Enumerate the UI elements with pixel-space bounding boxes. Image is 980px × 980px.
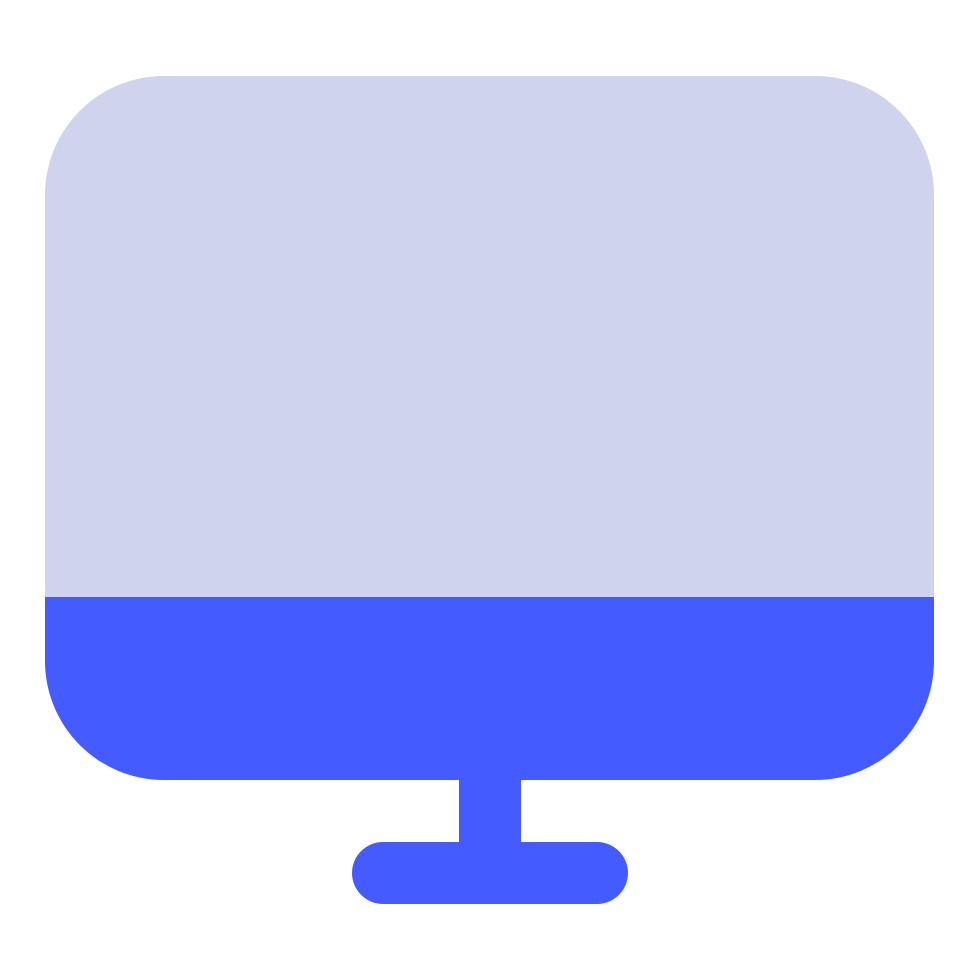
monitor stand neck [459, 778, 521, 844]
monitor bottom bezel [45, 597, 934, 780]
monitor screen [45, 76, 934, 597]
monitor stand base [352, 842, 628, 904]
